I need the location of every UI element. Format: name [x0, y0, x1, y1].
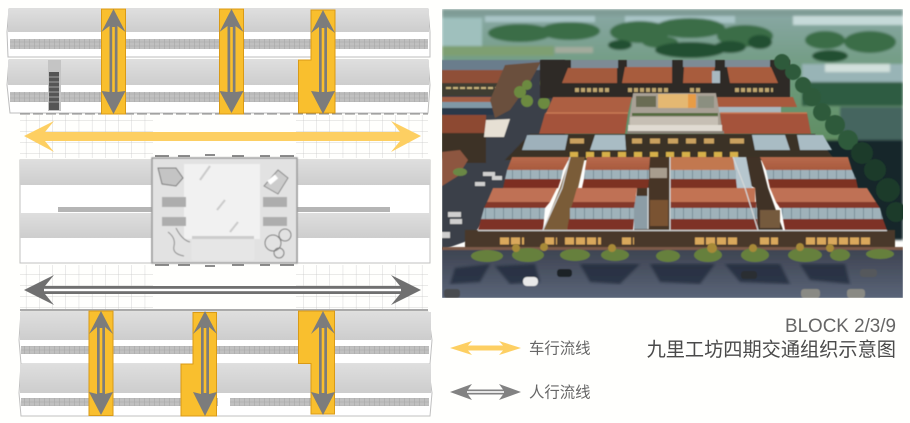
title: Chinese caption: 九里工坊四期交通组织示意图	[647, 339, 896, 361]
hall 4	[760, 157, 852, 170]
middle building right	[297, 160, 430, 263]
mid halls	[539, 93, 811, 134]
grey horizontal pedestrian arrow	[24, 275, 421, 305]
lower road grid	[20, 155, 428, 310]
hall 1	[507, 157, 570, 170]
rear central halls	[540, 60, 790, 98]
middle building left	[20, 160, 152, 263]
bottom building row 1	[19, 312, 432, 364]
glass links	[543, 157, 585, 230]
central plaza	[152, 158, 297, 263]
left rear buildings and lot	[442, 60, 565, 250]
upper road grid	[20, 114, 428, 158]
title: block number: BLOCK 2/3/9	[785, 316, 896, 337]
background landscape	[442, 9, 903, 240]
front row halls	[465, 157, 895, 250]
bottom building row 2	[19, 364, 432, 416]
hall 3	[670, 157, 735, 170]
top building row 1	[7, 9, 430, 57]
legend: vehicle flow	[450, 340, 591, 358]
yellow horizontal vehicle arrow	[24, 121, 421, 152]
title block	[647, 316, 896, 361]
yellow vehicle corridors	[89, 9, 335, 416]
legend: pedestrian flow	[450, 384, 591, 402]
panel: traffic organisation plan	[7, 9, 432, 416]
right tree line	[774, 54, 906, 222]
plaza	[627, 93, 723, 134]
street and trees	[442, 243, 903, 298]
vertical pedestrian arrows, bottom	[89, 311, 335, 416]
top building row 2	[7, 60, 430, 113]
legend label: vehicle: 车行流线	[529, 340, 591, 358]
legend arrow: vehicle	[450, 341, 521, 355]
vertical pedestrian arrows, top	[102, 9, 335, 114]
base under mid halls	[505, 134, 835, 160]
panel: aerial rendering	[442, 9, 906, 298]
legend arrow: pedestrian	[450, 384, 521, 400]
legend label: pedestrian: 人行流线	[529, 384, 591, 402]
hall 2	[585, 157, 650, 170]
